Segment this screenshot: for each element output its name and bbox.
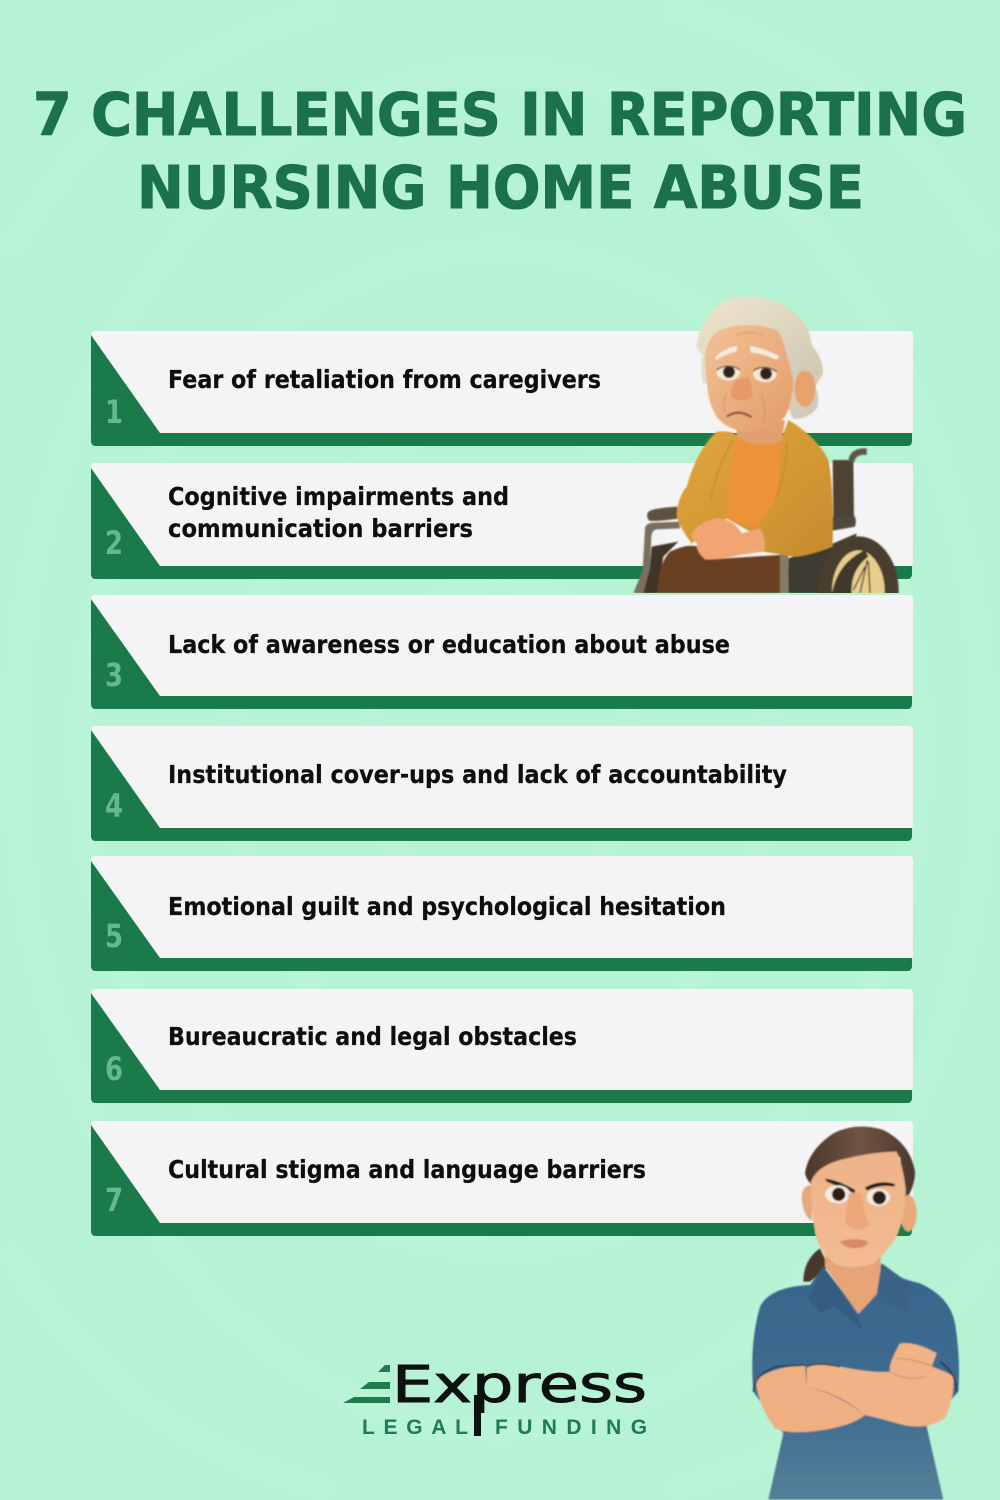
- list item 3: Lack of awareness or education about abuse: [168, 630, 730, 659]
- list item 4: [91, 726, 913, 841]
- ear: [794, 370, 816, 407]
- face: [811, 1152, 906, 1267]
- list item 1: 1: [105, 393, 123, 431]
- illustration: angry woman with crossed arms: [752, 1127, 959, 1500]
- cardigan folds: [711, 440, 787, 500]
- list item 1: Fear of retaliation from caregivers: [168, 365, 601, 394]
- list item 6: Bureaucratic and legal obstacles: [168, 1022, 577, 1051]
- wordmark: Express: [392, 1356, 647, 1415]
- ponytail: [803, 1248, 828, 1282]
- eyebrows: [715, 346, 779, 360]
- hair back: [697, 297, 823, 419]
- hair front: [782, 338, 822, 378]
- mouth: [727, 413, 752, 417]
- illustration: elderly woman in wheelchair: [632, 296, 900, 593]
- list item 3: [91, 595, 913, 709]
- logo speed stripes: [343, 1365, 390, 1403]
- title: [33, 80, 967, 222]
- hands: [692, 518, 765, 559]
- shirt: [752, 1263, 959, 1500]
- list item 5: Emotional guilt and psychological hesitation: [168, 892, 726, 921]
- mouth: [840, 1239, 868, 1248]
- eyes: [717, 364, 777, 382]
- neck: [825, 1250, 881, 1314]
- face: [705, 325, 793, 432]
- list item 4: 4: [105, 787, 123, 825]
- wrinkles: [724, 332, 765, 423]
- list item 1: [91, 331, 913, 446]
- wheelchair: [632, 447, 900, 593]
- nose: [845, 1193, 869, 1229]
- title: NURSING HOME ABUSE: [137, 153, 864, 222]
- list item 6: 6: [105, 1050, 123, 1088]
- list item 7: [91, 1121, 913, 1236]
- neck: [737, 420, 785, 445]
- nose: [731, 377, 753, 400]
- eyes: [825, 1185, 890, 1206]
- ears: [802, 1185, 917, 1232]
- pants: [657, 546, 780, 593]
- title: 7 CHALLENGES IN REPORTING: [33, 80, 967, 149]
- brows: [825, 1178, 895, 1193]
- list item 2: [91, 463, 913, 579]
- logo: Express Legal Funding: FUNDING: [495, 1416, 656, 1439]
- list item 2: Cognitive impairments and: [168, 482, 509, 511]
- hair back: [805, 1127, 915, 1202]
- tagline: LEGAL: [362, 1416, 477, 1439]
- list item 7: 7: [105, 1181, 123, 1219]
- list item 3: 3: [105, 656, 123, 694]
- collar: [808, 1263, 912, 1331]
- list item 5: [91, 856, 913, 971]
- list item 2: communication barriers: [168, 514, 473, 543]
- list item 4: Institutional cover-ups and lack of accountability: [168, 760, 787, 789]
- crossed arms: [753, 1343, 957, 1432]
- list item 6: [91, 989, 913, 1103]
- list item 5: 5: [105, 917, 123, 955]
- p descender: [474, 1395, 481, 1436]
- list item 7: Cultural stigma and language barriers: [168, 1155, 646, 1184]
- orange shirt: [727, 437, 782, 528]
- cardigan: [677, 420, 833, 557]
- logo: Express Legal Funding: [343, 1356, 656, 1439]
- list item 2: 2: [105, 524, 123, 562]
